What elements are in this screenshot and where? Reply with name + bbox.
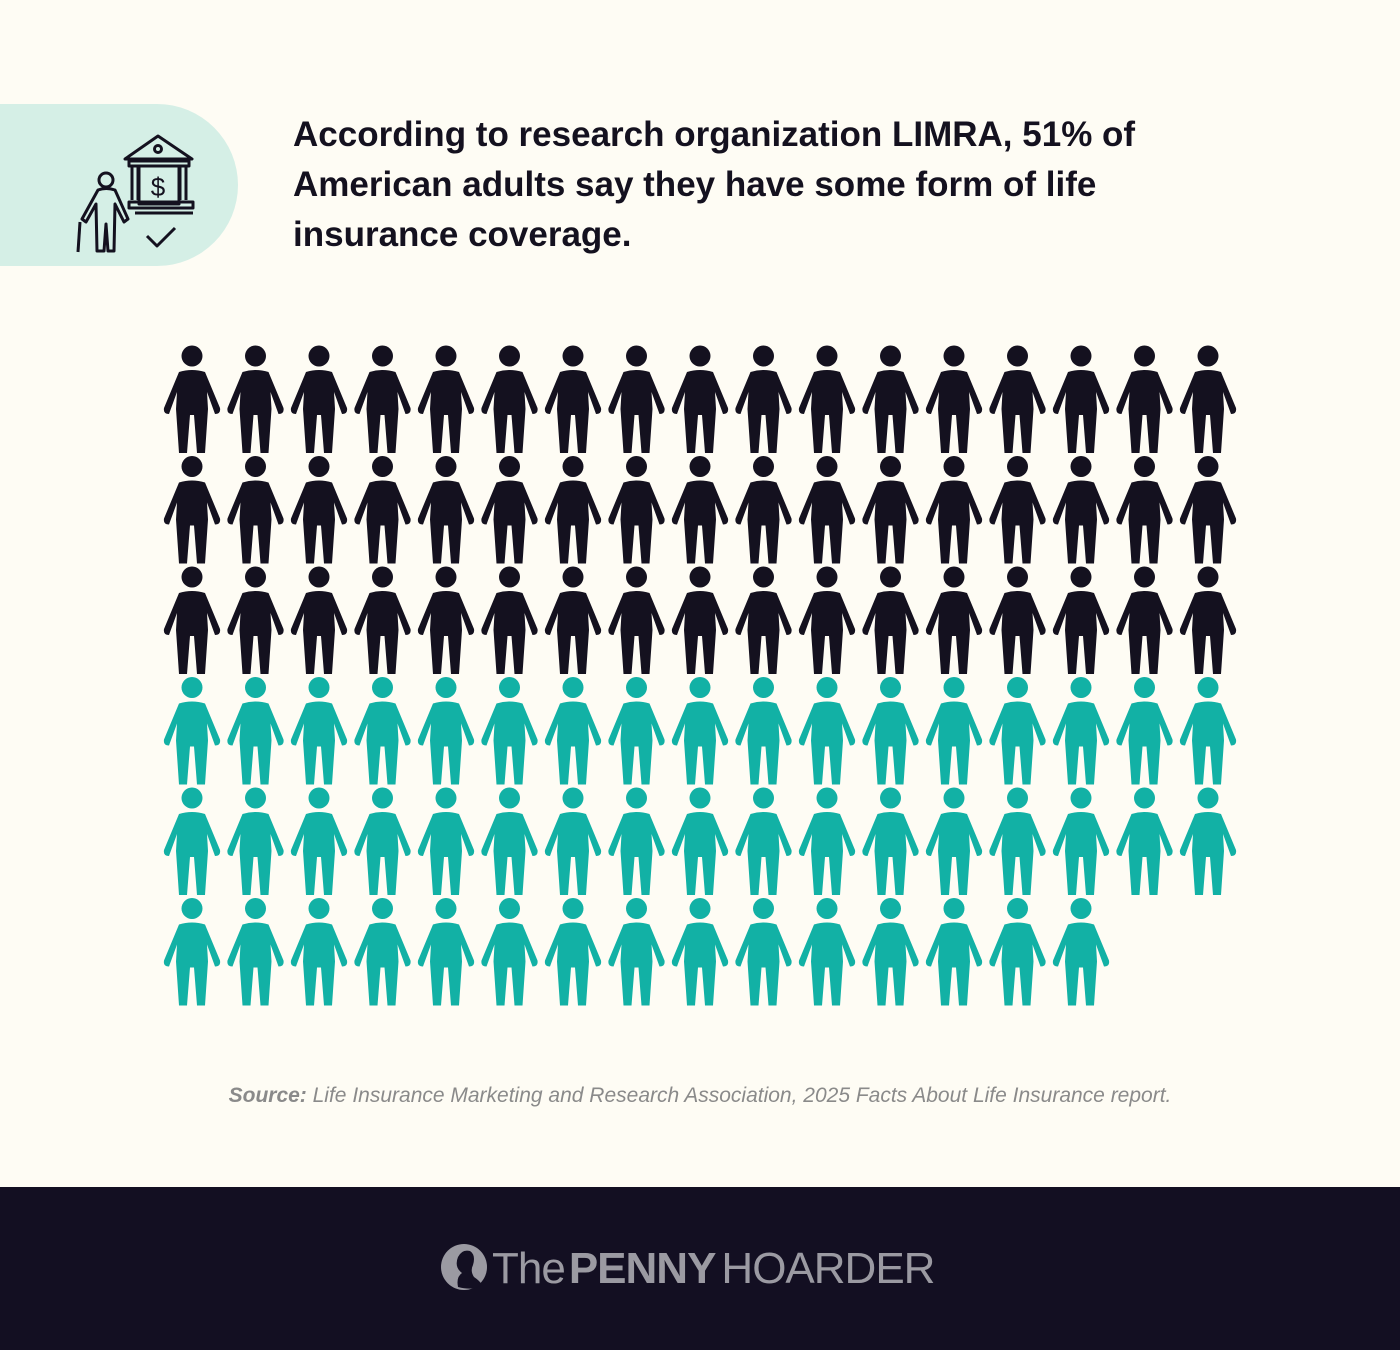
source note: Source: Life Insurance Marketing and Research Association, 2025 Facts About Life Insurance report. [229,1084,1171,1107]
footer with logo [0,1187,1400,1350]
logo: The Penny Hoarder: ThePENNYHOARDER [492,1244,934,1293]
header band with icon [0,104,238,266]
pictogram chart: 51 dark, 49 teal [164,346,1236,1006]
icon: elderly man with bank [76,134,194,252]
icon: elderly man with bank: $ [151,172,166,202]
title text: According to research organization LIMRA, 51% of American adults say they have some form of life insurance coverage. [293,115,1135,254]
